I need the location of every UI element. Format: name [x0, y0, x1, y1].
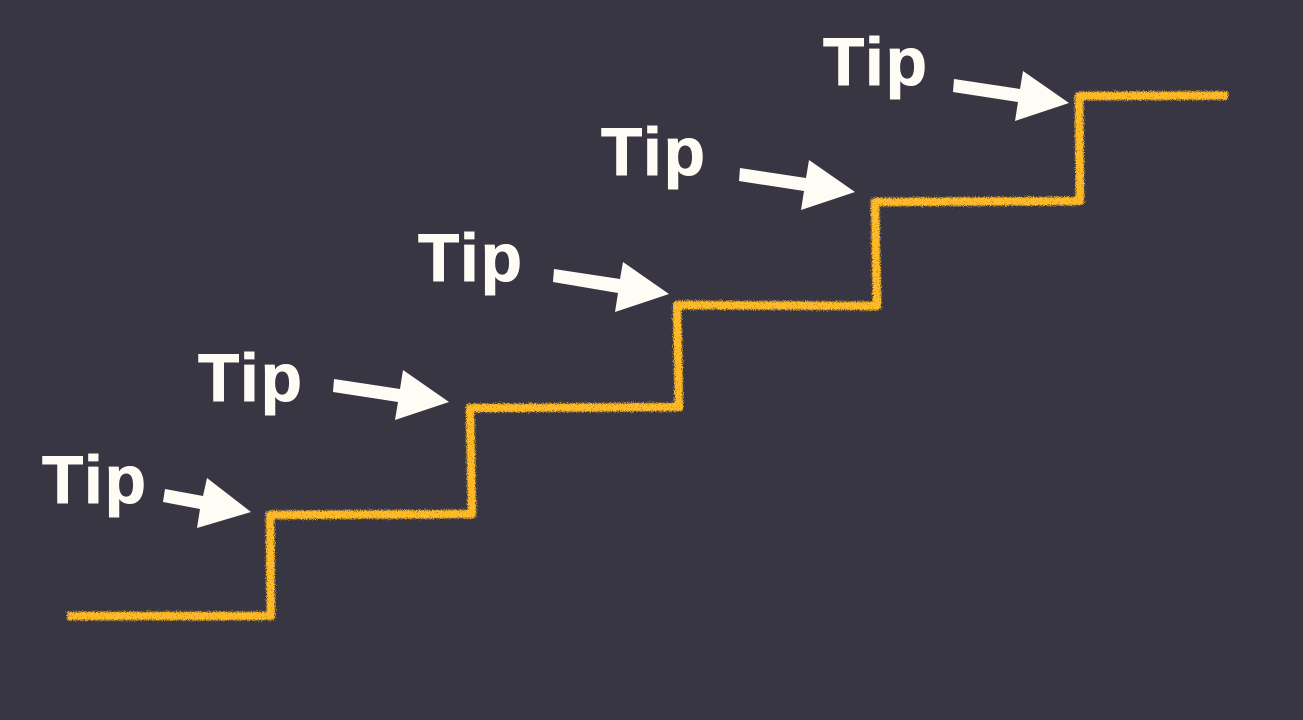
- step 2 arrow: [333, 370, 449, 420]
- step 1 label: Tip: [42, 443, 148, 518]
- step 4 arrow: [739, 160, 855, 210]
- step 5 label: Tip: [823, 25, 929, 100]
- chalk staircase line: [67, 96, 1228, 616]
- step 3 arrow: [553, 262, 669, 312]
- step 1 arrow: [163, 478, 251, 528]
- step 4 label: Tip: [601, 115, 707, 190]
- step 2 label: Tip: [198, 341, 304, 416]
- step 3 label: Tip: [418, 221, 524, 296]
- step 5 arrow: [953, 71, 1069, 121]
